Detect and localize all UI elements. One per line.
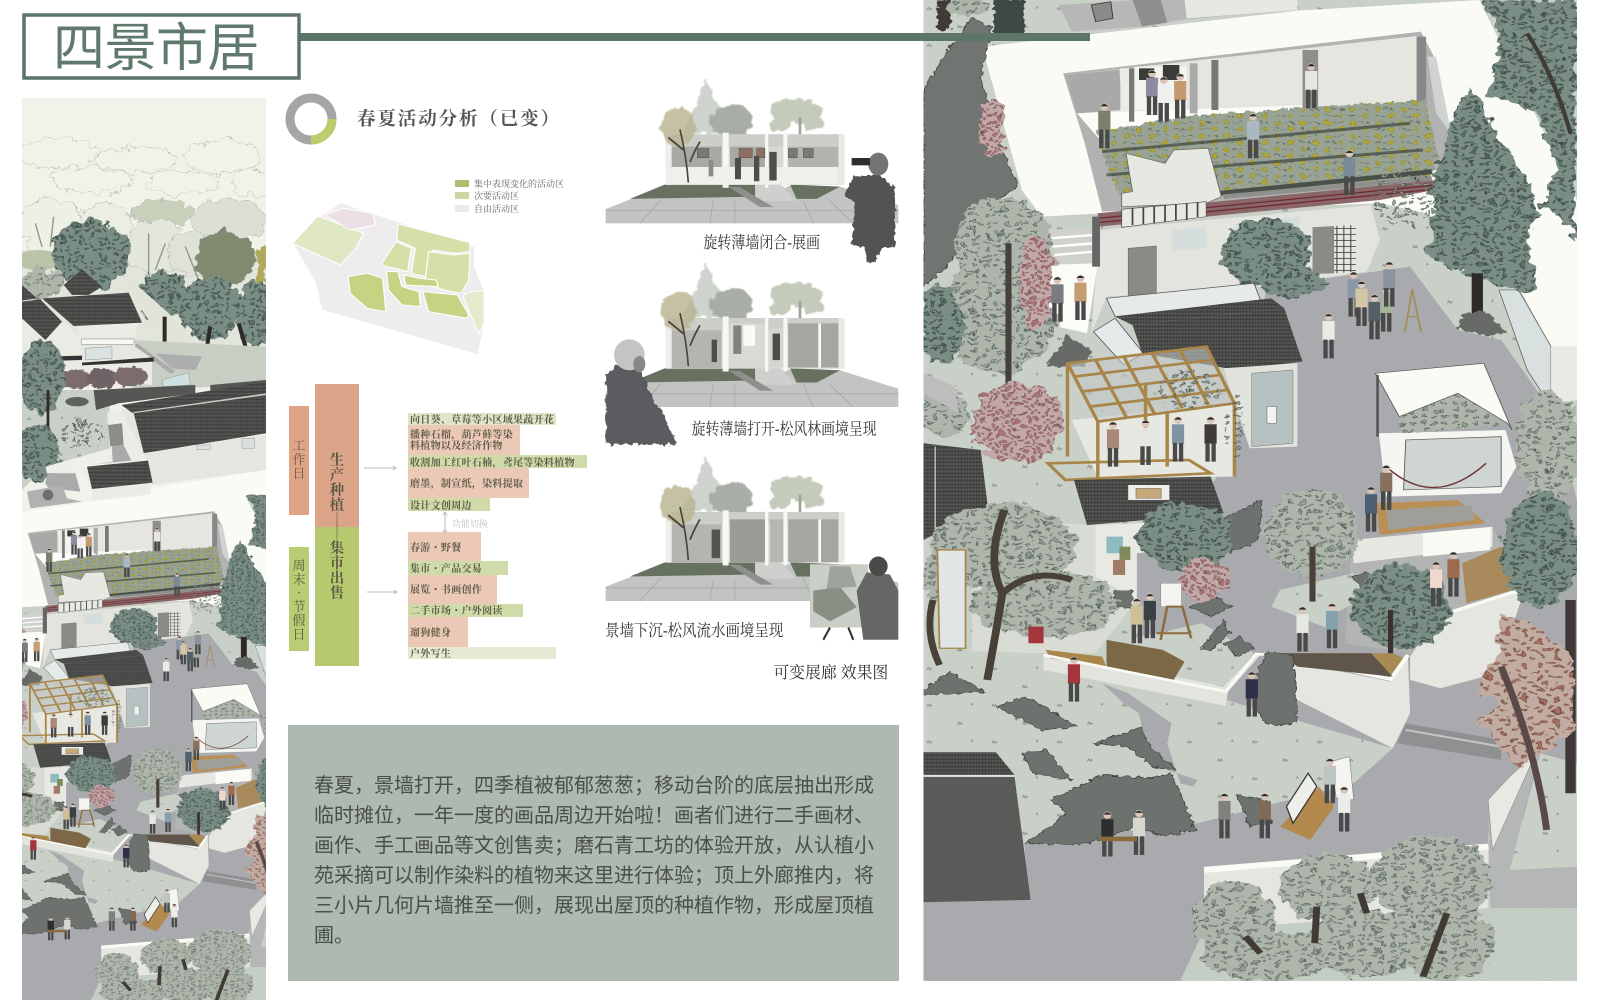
- activity rows: 集市・产品交易: [410, 562, 482, 575]
- column: production and market: 生: [330, 452, 345, 469]
- activity rows: 遛狗健身: [410, 626, 451, 639]
- rendering 1 caption: 旋转薄墙闭合-展画: [703, 232, 820, 252]
- roof garden terrace: [1063, 32, 1453, 212]
- rendering 3 interior: [672, 519, 838, 563]
- rendering 2 interior: [672, 323, 838, 369]
- panel: right main axonometric scene: [920, 0, 1581, 982]
- white house right: [1375, 363, 1516, 497]
- legend: 次要活动区: [474, 190, 519, 201]
- label: function switch: 功能切换: [452, 518, 488, 529]
- icon: ring: [290, 98, 332, 140]
- bar: weekends and holidays: [289, 547, 309, 651]
- activity rows: [408, 413, 587, 660]
- bamboo right edge: [1516, 390, 1581, 503]
- railing: [1098, 178, 1453, 227]
- misty background trees: [15, 198, 266, 350]
- panel: left tall perspective strip: [22, 98, 266, 1000]
- bar: weekends and holidays: 假: [292, 613, 306, 628]
- description text: 春夏，景墙打开，四季植被郁郁葱葱；移动台阶的底层抽出形成: [314, 774, 874, 797]
- book stall: [1280, 500, 1525, 677]
- rendering 2 caption: 旋转薄墙打开-松风林画境呈现: [692, 419, 877, 439]
- activity rows: 户外写生: [410, 647, 451, 660]
- plaza planting: [1410, 263, 1505, 335]
- dark building lower left: [923, 752, 1031, 902]
- pavement: [923, 267, 1577, 981]
- white roof plane: [982, 0, 1577, 347]
- activity diagram: [289, 384, 587, 666]
- people on roof: [1098, 63, 1355, 195]
- column: production and market: ｜: [330, 525, 344, 542]
- column: production and market: ｜: [330, 512, 344, 529]
- site activity map: [293, 203, 484, 355]
- activity rows: 设计文创周边: [410, 499, 472, 512]
- title box: [24, 15, 299, 78]
- activity rows: 播种石榴，葫芦藓等染: [410, 428, 513, 441]
- rendering 2: walls open: [606, 264, 898, 407]
- easel and canvas: [1156, 583, 1191, 640]
- lower left garden, walls and roofs: [14, 340, 266, 508]
- legend: [455, 178, 564, 214]
- bottom wall: [1204, 847, 1488, 930]
- column: production and market: 市: [330, 555, 345, 572]
- shrub at courtyard: [1221, 168, 1438, 297]
- white roof strip: [22, 470, 266, 516]
- wooden pergola: [1048, 347, 1244, 480]
- rendering 3: wall sunk: [606, 458, 898, 601]
- column: production and market: 植: [330, 496, 345, 514]
- plaza people: [1051, 262, 1395, 358]
- bar: workdays: [289, 406, 309, 515]
- column: production and market: 售: [330, 584, 344, 602]
- dark roof lower left: [923, 443, 992, 540]
- activity rows: 料植物以及经济作物: [410, 439, 503, 452]
- bar: workdays: 工: [292, 438, 306, 453]
- header rule: [300, 33, 1090, 41]
- section heading with ring icon: [290, 98, 561, 140]
- pale blue right wall: [1499, 290, 1551, 407]
- bar: workdays: 日: [292, 466, 306, 481]
- description text: 圃。: [314, 925, 354, 947]
- rock cliff: [923, 18, 1018, 287]
- description text: 画作、手工画品等文创售卖；磨石青工坊的体验开放，从认植小: [314, 834, 874, 857]
- title text: 四景市居: [53, 20, 259, 78]
- planting beds with yellow crops: [1097, 100, 1438, 197]
- bottom grass: [1180, 908, 1577, 981]
- description text: 临时摊位，一年一度的画品周边开始啦！画者们进行二手画材、: [314, 804, 874, 827]
- top terrace fragment: [1059, 0, 1297, 32]
- sky paper background with cloud outlines: [19, 93, 279, 513]
- gallery summary caption: 可变展廊 效果图: [773, 663, 888, 683]
- people in mid scene: [1068, 465, 1460, 717]
- lower crop of the plaza scene: [22, 494, 266, 1000]
- activity rows: 春游・野餐: [410, 541, 462, 554]
- big cedar tree: [1427, 87, 1538, 335]
- ground base: [920, 0, 1579, 981]
- panel: description: [288, 725, 899, 981]
- geometric screen walls: [1122, 148, 1221, 207]
- painter stall and visitors: [1100, 757, 1354, 857]
- description text: 三小片几何片墙推至一侧，展现出屋顶的种植作物，形成屋顶植: [314, 894, 874, 917]
- description text: 苑采摘可以制作染料的植物来这里进行体验；顶上外廊推内，将: [314, 864, 874, 887]
- red berries on cliff: [979, 98, 1004, 158]
- tiled roof building: [1093, 283, 1303, 448]
- planter retaining walls: [1044, 527, 1525, 760]
- rendering 1 tree: [661, 108, 700, 182]
- figure: painter at easel: [810, 556, 898, 640]
- column: production and market: 产: [330, 467, 344, 484]
- bar: weekends and holidays: 节: [292, 599, 306, 614]
- large foreground trees: [1191, 837, 1492, 982]
- dark trees behind the house: [22, 216, 266, 346]
- activity rows: 收割加工红叶石楠，鸢尾等染料植物: [410, 456, 575, 469]
- bar: weekends and holidays: 周: [292, 558, 306, 573]
- activity rows: 二手市场・户外阅读: [410, 604, 503, 617]
- central trees: [922, 490, 1579, 680]
- rocks: [923, 500, 1384, 845]
- description text: [314, 774, 874, 947]
- red shrubs row: [59, 367, 147, 389]
- red-leaf tree: [1473, 600, 1575, 830]
- lower building wall: [1042, 205, 1380, 333]
- trunk upper right: [1527, 33, 1571, 133]
- bar: weekends and holidays: 日: [292, 627, 306, 642]
- small house in centre: [972, 477, 1224, 653]
- grass mound: [923, 650, 1393, 843]
- heading text: 春夏活动分析（已变）: [357, 108, 561, 130]
- legend: 集中表现变化的活动区: [474, 178, 564, 189]
- column: production and market: 种: [330, 481, 345, 499]
- bar: workdays: 作: [292, 452, 306, 467]
- red cloth on tree: [1028, 627, 1044, 643]
- gallery renderings: [605, 80, 898, 683]
- white end wall: [1551, 347, 1577, 403]
- right ramp wall: [1488, 747, 1577, 908]
- stepped stone path: [1102, 683, 1198, 787]
- rendering 1: walls closed: [606, 80, 898, 223]
- activity rows: 磨墨，制宣纸，染料提取: [410, 477, 523, 490]
- activity rows: 展览・书画创作: [410, 583, 482, 596]
- bar: weekends and holidays: ·: [297, 585, 301, 600]
- bar: weekends and holidays: 末: [292, 572, 306, 587]
- small tree top-left: [936, 0, 1026, 33]
- legend: 自由活动区: [474, 203, 519, 214]
- left trees: [920, 197, 1091, 463]
- figure: photographer: [845, 153, 895, 262]
- rendering 1 interior: [672, 147, 838, 185]
- pine upper right: [1482, 0, 1577, 243]
- easel: [1405, 289, 1421, 332]
- column: production and market: [315, 384, 359, 666]
- rendering 3 caption: 景墙下沉-松风流水画境呈现: [605, 621, 783, 640]
- upper house with dark roofs: [22, 269, 266, 390]
- rendering 3 tree: [661, 485, 700, 560]
- arrows: [364, 466, 447, 594]
- column: production and market: 出: [330, 570, 344, 587]
- figure: sketching elder: [606, 339, 678, 445]
- activity rows: 向日葵、草莓等小区域果蔬开花: [410, 413, 554, 426]
- rendering 2 tree: [661, 292, 700, 366]
- column: production and market: 集: [330, 539, 345, 557]
